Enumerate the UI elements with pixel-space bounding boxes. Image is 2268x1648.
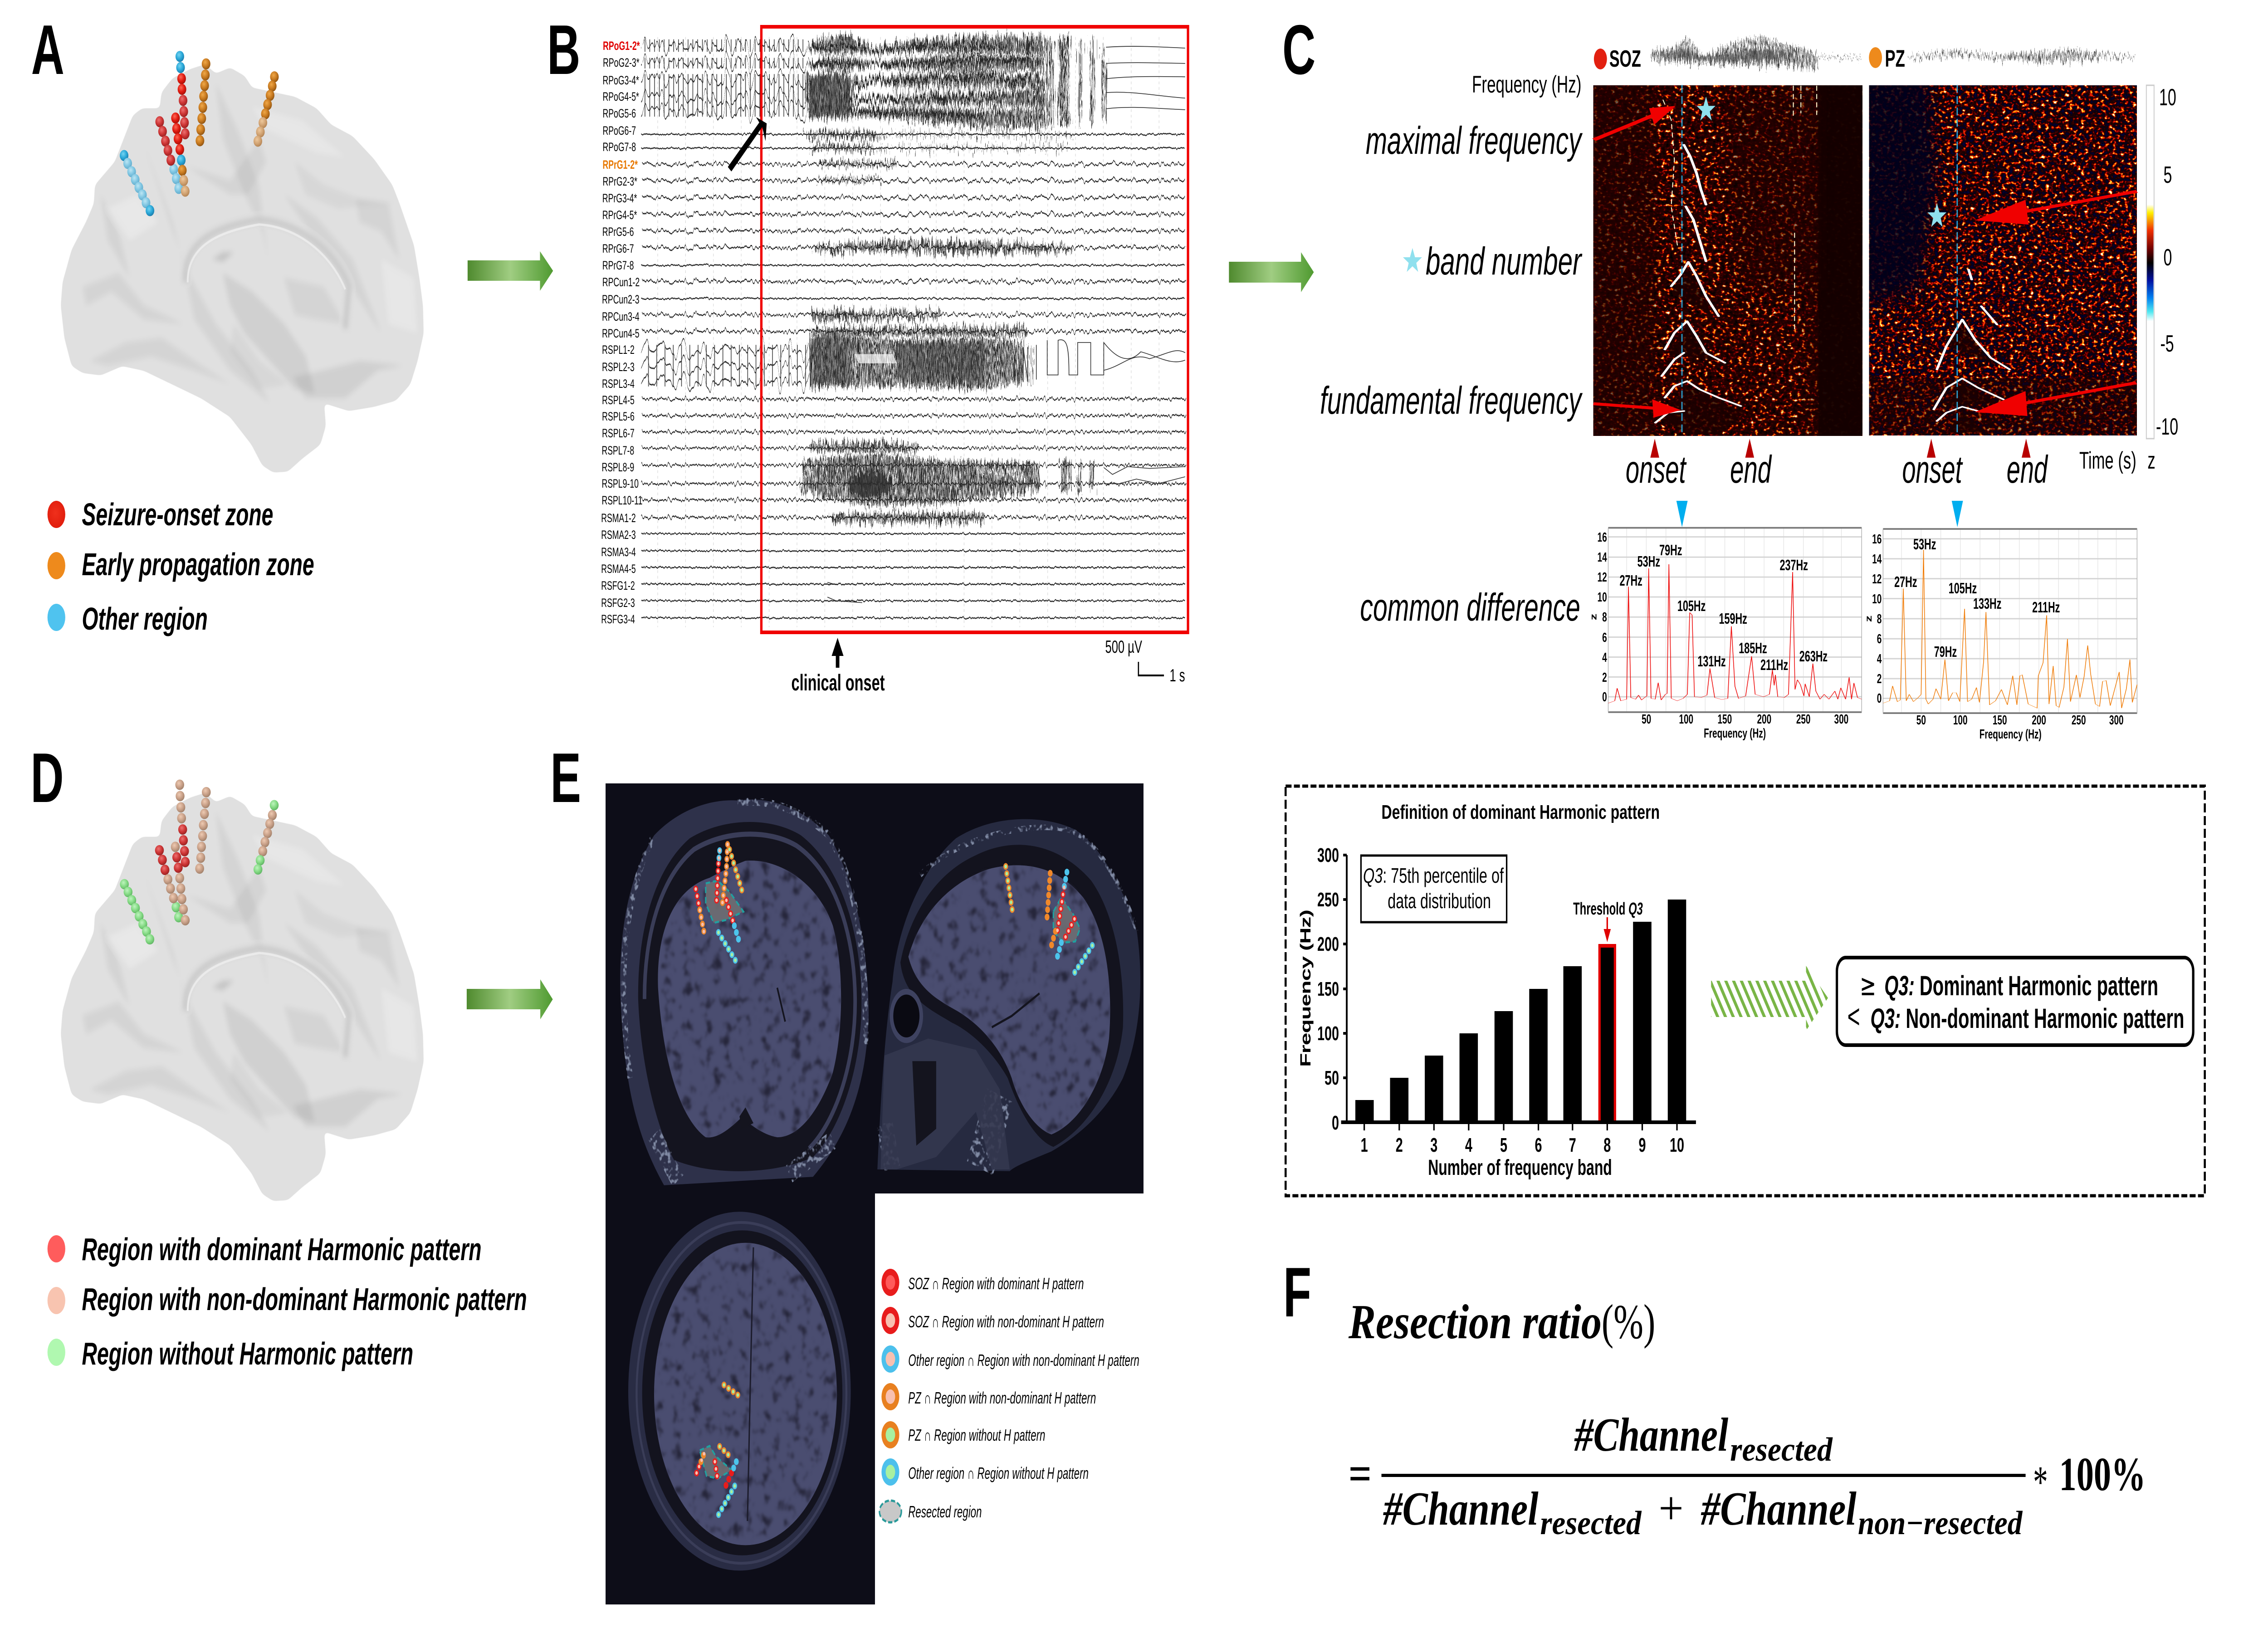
clinical onset arrow: [831, 638, 844, 668]
dashed frame: [1286, 786, 2205, 1196]
formula body: #Channel: [1701, 1483, 1857, 1536]
spectrum chart SOZ: 0: [1602, 690, 1607, 704]
spectrum chart PZ: 300: [2109, 713, 2124, 728]
rule box: <: [1847, 998, 1860, 1036]
letter E: E: [550, 738, 581, 817]
spectrum chart SOZ: 6: [1602, 631, 1607, 645]
spectrum chart SOZ: 131Hz: [1697, 653, 1726, 670]
legend: other non-dominant: [881, 1345, 1139, 1373]
stars on spectrograms: [1696, 97, 1946, 227]
spectrum chart PZ: 12: [1872, 572, 1882, 587]
red annotation arrows: [1593, 106, 2137, 418]
colorbar: -5: [2160, 331, 2174, 357]
spectrum chart PZ: 105Hz: [1949, 580, 1977, 597]
legend: SOZ dominant: [881, 1269, 1084, 1296]
bar chart: 9: [1638, 1134, 1646, 1156]
rule box: [1837, 958, 2193, 1045]
channel labels: RPoG4-5*: [602, 89, 639, 103]
bar chart: 6: [1535, 1134, 1542, 1156]
colorbar: 0: [2163, 245, 2172, 271]
label band number: band number: [1426, 240, 1583, 283]
channel labels: RPCun3-4: [602, 309, 640, 323]
formula body: resected: [1540, 1504, 1642, 1542]
MRI legend: [880, 1269, 1139, 1522]
bar chart: 10: [1670, 1134, 1684, 1156]
bar chart: 150: [1317, 978, 1339, 1000]
MRI background: [606, 783, 1144, 1604]
spectrum chart PZ: 4: [1877, 652, 1882, 666]
spectrum chart PZ: 79Hz: [1934, 643, 1957, 660]
legend text: other region: Other region: [82, 601, 208, 636]
colorbar: 5: [2163, 162, 2172, 188]
spectrum chart PZ: 2: [1877, 672, 1882, 686]
legend: SOZ non-dominant: SOZ ∩ Region with non-dominant H pattern: [908, 1313, 1104, 1331]
channel labels: RSPL7-8: [602, 443, 634, 457]
legend text: dominant: Region with dominant Harmonic pattern: [82, 1231, 482, 1267]
PZ header: PZ: [1885, 45, 1905, 72]
bar chart: 1: [1361, 1134, 1368, 1156]
Q3 note box: Q3: 75th percentile of: [1363, 865, 1504, 888]
spectrum chart PZ: 0: [1877, 691, 1882, 706]
definition title: Definition of dominant Harmonic pattern: [1382, 801, 1660, 823]
formula body: #Channel: [1383, 1483, 1539, 1536]
spectrum chart SOZ: z: [1589, 614, 1598, 620]
channel labels: RSFG3-4: [601, 612, 635, 626]
channel labels: RPoG5-6: [602, 106, 636, 120]
onset and end markers: end: [2007, 448, 2048, 491]
onset and end markers: onset: [1902, 448, 1963, 491]
panel C: spectrograms and spectra: [1282, 10, 2178, 742]
channel labels: RSPL3-4: [602, 377, 635, 391]
channel labels: RPoG2-3*: [603, 55, 640, 69]
bar chart: [1297, 844, 1696, 1180]
clinical onset label: clinical onset: [792, 670, 885, 695]
legend: resected region: Resected region: [908, 1503, 982, 1521]
panel E: MRI with electrodes: [550, 738, 1144, 1604]
spectrum chart SOZ: 12: [1598, 570, 1607, 585]
spectrum chart PZ: 50: [1916, 713, 1926, 728]
legend text: non-dominant: Region with non-dominant Harmonic pattern: [82, 1281, 527, 1317]
bar chart: 300: [1317, 844, 1339, 866]
brain D: [61, 793, 423, 1201]
spectrum chart SOZ: 300: [1834, 712, 1848, 727]
channel labels: RSPL5-6: [602, 409, 635, 423]
channel labels: RPCun1-2: [602, 275, 640, 289]
channel labels: RPoG6-7: [602, 123, 636, 137]
bar chart: 50: [1325, 1066, 1339, 1089]
spectrum chart SOZ: 250: [1796, 712, 1810, 727]
formula heading: (%): [1602, 1295, 1655, 1349]
legend dot: without: [48, 1339, 65, 1366]
legend: PZ without: PZ ∩ Region without H pattern: [908, 1426, 1045, 1444]
legend dot: early propagation zone: [48, 552, 65, 579]
channel labels: RSPL1-2: [602, 342, 635, 357]
legend dot: non-dominant: [48, 1287, 65, 1314]
channel labels: RSPL4-5: [602, 393, 635, 407]
spectrum chart PZ: [1864, 528, 2137, 742]
spectrum chart SOZ: 105Hz: [1677, 597, 1706, 614]
spectrum chart PZ: 6: [1877, 632, 1882, 646]
formula body: [1349, 1409, 2146, 1542]
hatched arrow: [1711, 966, 1828, 1031]
panel A: electrode brain map: [31, 10, 423, 636]
scale bar: [1105, 636, 1185, 685]
channel labels: RPrG4-5*: [602, 208, 637, 222]
letter A: A: [31, 10, 64, 89]
letter F: F: [1283, 1252, 1311, 1331]
channel labels: RPrG2-3*: [602, 174, 637, 188]
channel labels: RSPL8-9: [602, 460, 634, 474]
PZ header: [1869, 45, 2136, 72]
legend: other without: [881, 1458, 1089, 1486]
legend text: seizure-onset zone: Seizure-onset zone: [82, 496, 273, 532]
fraction line: [1382, 1474, 2026, 1477]
spectrum chart PZ: 250: [2072, 713, 2086, 728]
spectrum chart SOZ: 4: [1602, 650, 1607, 665]
legend D: [48, 1231, 527, 1371]
rule box: ≥: [1860, 968, 1876, 1003]
axis label frequency: Frequency (Hz): [1472, 71, 1581, 98]
spectrum chart SOZ: Frequency (Hz): [1704, 726, 1766, 741]
spectrum chart SOZ: 14: [1598, 550, 1607, 565]
channel labels: RPrG3-4*: [602, 191, 637, 205]
channel labels: RPoG3-4*: [602, 73, 639, 87]
bar chart: Number of frequency band: [1428, 1155, 1612, 1180]
channel labels: RPCun4-5: [602, 326, 640, 340]
spectrum chart SOZ: 263Hz: [1799, 648, 1828, 665]
brain A: [61, 65, 423, 472]
channel labels: RSFG2-3: [601, 596, 635, 610]
spectrum chart SOZ: 50: [1642, 712, 1651, 727]
spectrum chart SOZ: 79Hz: [1659, 542, 1682, 558]
scalp texture: [624, 802, 1137, 1181]
spectrum chart SOZ: [1589, 528, 1862, 741]
EEG traces: [641, 36, 1185, 627]
formula heading: [1348, 1295, 1655, 1349]
legend: SOZ non-dominant: [881, 1307, 1104, 1334]
spectrum chart PZ: 150: [1993, 713, 2007, 728]
arrow A to B: [468, 251, 553, 291]
panel B: intracranial EEG traces: [547, 10, 1188, 695]
colorbar: -10: [2156, 414, 2178, 440]
channel labels: RPrG1-2*: [602, 157, 638, 171]
arrow D to E: [467, 979, 553, 1019]
colorbar: [2146, 84, 2178, 440]
legend: other non-dominant: Other region ∩ Region with non-dominant H pattern: [908, 1351, 1139, 1369]
bar chart: 3: [1430, 1134, 1437, 1156]
spectrum chart SOZ: 211Hz: [1760, 656, 1788, 673]
spectrum chart SOZ: 159Hz: [1719, 610, 1747, 627]
spectrum chart SOZ: 16: [1598, 530, 1607, 545]
bar chart: Frequency (Hz): [1297, 910, 1314, 1067]
channel labels: RSPL9-10: [602, 476, 639, 490]
spectrum chart PZ: 10: [1872, 592, 1882, 606]
channel labels: RPCun2-3: [602, 292, 640, 306]
channel labels: RSMA4-5: [601, 562, 636, 576]
formula body: *: [2033, 1457, 2048, 1507]
formula body: =: [1349, 1447, 1372, 1501]
bar chart: 8: [1603, 1134, 1611, 1156]
threshold label and arrow: Threshold Q3: [1573, 899, 1643, 918]
electrodes D: [120, 780, 279, 944]
letter B: B: [547, 10, 580, 89]
channel labels: RSMA2-3: [601, 528, 636, 542]
spectrum chart PZ: 14: [1872, 552, 1882, 567]
formula body: resected: [1730, 1431, 1833, 1468]
channel labels: RPrG7-8: [602, 258, 634, 272]
black arrow to onset: [728, 117, 767, 171]
channel labels: RPrG6-7: [602, 241, 634, 255]
formula body: 100%: [2059, 1448, 2146, 1501]
resection regions: [700, 880, 1080, 1479]
legend dot: other region: [48, 604, 65, 631]
formula heading: Resection ratio: [1348, 1295, 1602, 1349]
onset and end markers: onset: [1626, 448, 1687, 491]
rule box: Q3: Dominant Harmonic pattern: [1884, 970, 2158, 1001]
MRI head shells: [620, 799, 1140, 1570]
channel labels: RSPL10-11: [602, 493, 642, 507]
legend: resected region: [880, 1501, 982, 1522]
spectrum chart SOZ: 200: [1757, 712, 1771, 727]
Q3 note box: [1361, 856, 1507, 922]
threshold label and arrow: [1573, 899, 1643, 942]
spectrum chart SOZ: 53Hz: [1637, 553, 1660, 570]
channel labels: RSFG1-2: [601, 578, 635, 592]
colorbar: 10: [2159, 84, 2176, 111]
letter D: D: [30, 738, 64, 817]
MRI brain tissue: [654, 861, 1110, 1545]
panel F: resection ratio formula: [1283, 1252, 2146, 1542]
bar chart: 5: [1500, 1134, 1507, 1156]
spectrum chart SOZ: 27Hz: [1619, 572, 1642, 589]
spectrum chart PZ: 100: [1953, 713, 1968, 728]
rule box: Q3: Non-dominant Harmonic pattern: [1870, 1002, 2185, 1034]
label fundamental frequency: fundamental frequency: [1320, 379, 1583, 422]
label common difference: common difference: [1360, 586, 1580, 629]
letter C: C: [1282, 10, 1315, 89]
threshold bar: [1599, 946, 1615, 1122]
spectrum chart SOZ: 100: [1679, 712, 1693, 727]
legend: PZ non-dominant: [881, 1383, 1096, 1410]
spectrum chart PZ: Frequency (Hz): [1980, 727, 2042, 742]
legend dot: dominant: [48, 1235, 65, 1262]
spectrum chart PZ: 200: [2032, 713, 2046, 728]
onset and end markers: z: [2147, 447, 2156, 474]
legend: other without: Other region ∩ Region without H pattern: [908, 1464, 1089, 1482]
bar chart: 7: [1569, 1134, 1576, 1156]
legend dot: seizure-onset zone: [48, 501, 65, 528]
legend A: [48, 496, 314, 636]
channel labels: RSMA1-2: [601, 511, 636, 525]
sagittal face and eye: [739, 988, 1040, 1521]
spectrum chart SOZ: 185Hz: [1739, 640, 1767, 656]
panel: definition of dominant Harmonic pattern: [1286, 786, 2205, 1196]
channel labels: RSPL6-7: [602, 426, 635, 440]
spectrum chart SOZ: 10: [1598, 590, 1607, 605]
Q3 note box: data distribution: [1388, 890, 1491, 913]
spectrum chart PZ: 133Hz: [1973, 595, 2001, 612]
electrodes on MRI: [696, 845, 1092, 1517]
formula body: non−resected: [1858, 1504, 2023, 1542]
spectrum chart PZ: 27Hz: [1894, 573, 1917, 590]
bar chart: 100: [1317, 1022, 1339, 1044]
legend: SOZ dominant: SOZ ∩ Region with dominant H pattern: [908, 1275, 1084, 1293]
spectrum chart SOZ: 237Hz: [1780, 557, 1808, 573]
formula body: #Channel: [1574, 1409, 1729, 1462]
spectrum chart PZ: 53Hz: [1913, 536, 1936, 553]
formula body: +: [1658, 1482, 1683, 1535]
bar chart: 200: [1317, 933, 1339, 955]
star icon: [1403, 248, 1422, 272]
legend text: without: Region without Harmonic pattern: [82, 1335, 413, 1371]
bar chart: 250: [1317, 888, 1339, 910]
SOZ header: SOZ: [1609, 46, 1641, 72]
bar chart: 0: [1332, 1111, 1339, 1134]
electrodes A: [120, 51, 279, 216]
channel labels: RPrG5-6: [602, 225, 634, 239]
onset and end markers: Time (s): [2079, 447, 2136, 474]
panel D: harmonic pattern brain map: [30, 738, 527, 1371]
label maximal frequency: maximal frequency: [1366, 119, 1583, 162]
legend: PZ non-dominant: PZ ∩ Region with non-dominant H pattern: [908, 1389, 1096, 1407]
legend text: early propagation zone: Early propagation zone: [82, 546, 314, 582]
onset and end markers: [1626, 439, 2156, 527]
channel labels: RPoG7-8: [602, 140, 636, 154]
arrow B to C: [1229, 252, 1314, 292]
channel labels: RSMA3-4: [601, 545, 636, 559]
SOZ header: [1594, 37, 1861, 72]
bar chart: 2: [1396, 1134, 1403, 1156]
spectrum chart PZ: 211Hz: [2032, 599, 2060, 616]
red selection box: [761, 27, 1188, 632]
channel labels: RPoG1-2*: [603, 39, 640, 53]
scale bar: 500 µV: [1105, 636, 1142, 656]
spectrum chart PZ: 8: [1877, 612, 1882, 626]
spectrogram PZ: [1869, 85, 2137, 435]
spectrum chart SOZ: 2: [1602, 670, 1607, 685]
spectrum chart PZ: z: [1864, 616, 1874, 622]
onset and end markers: end: [1730, 448, 1772, 491]
spectrum chart SOZ: 150: [1718, 712, 1732, 727]
legend: PZ without: [881, 1421, 1045, 1448]
channel labels: RSPL2-3: [602, 360, 635, 374]
spectrum chart PZ: 16: [1872, 532, 1882, 547]
spectrum chart SOZ: 8: [1602, 610, 1607, 625]
channel labels: [601, 39, 642, 626]
spectrogram SOZ: [1593, 85, 1862, 436]
scale bar: 1 s: [1169, 665, 1185, 685]
bar chart: 4: [1465, 1134, 1472, 1156]
